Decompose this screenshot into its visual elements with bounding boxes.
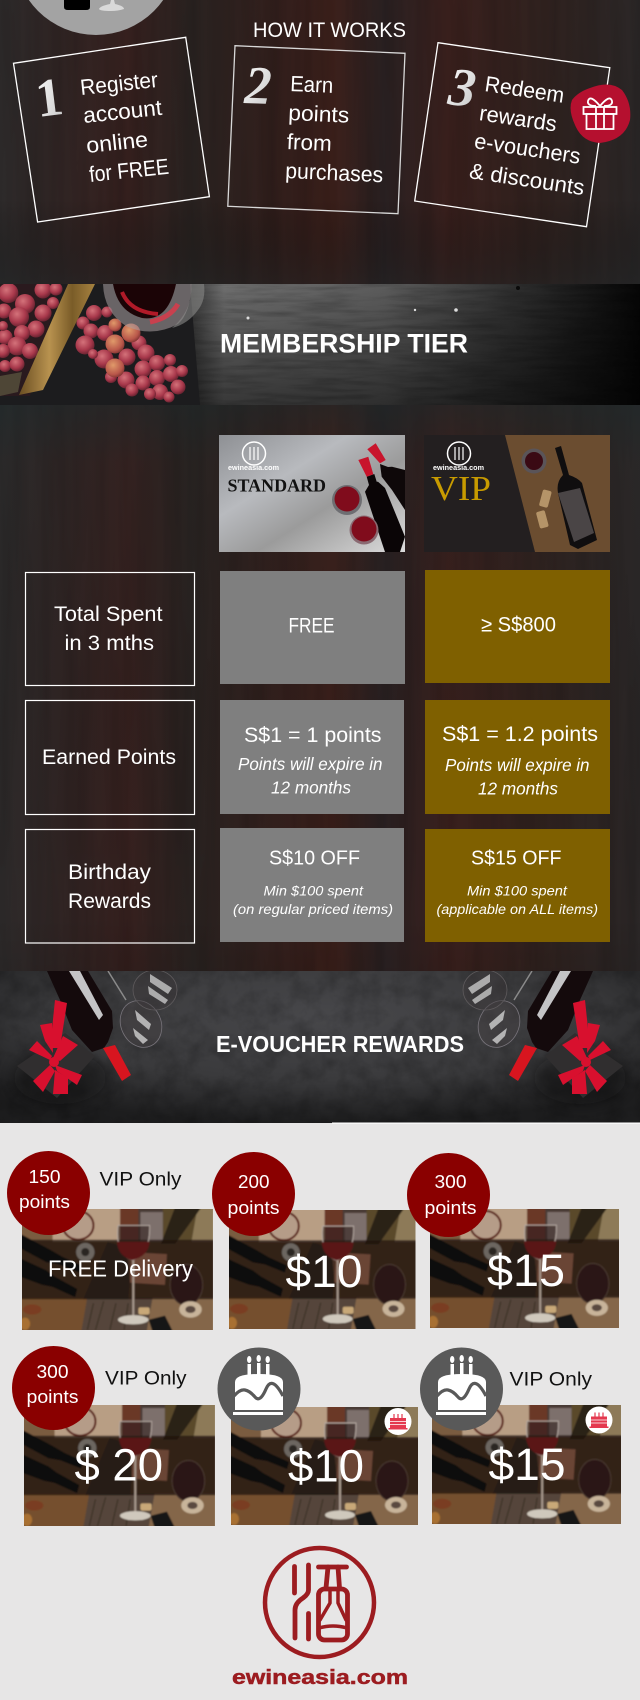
vip: earned points cell [425, 700, 610, 814]
standard: birthday cell [220, 828, 404, 942]
row label: total spent: in 3 mths [64, 632, 154, 655]
voucher: $10 birthday [218, 1348, 420, 1527]
logo mark [265, 1548, 374, 1657]
row label: earned points: Earned Points [42, 746, 176, 769]
card: vip tier: VIP [431, 469, 491, 508]
standard: earned points cell: Points will expire in [238, 754, 382, 774]
points badge: 300 [407, 1153, 490, 1237]
points badge: 150: points [19, 1191, 70, 1212]
points badge: 300: 300 [36, 1361, 68, 1382]
voucher title: FREE Delivery [48, 1256, 193, 1282]
panel: how it works [0, 0, 640, 284]
vip: total spent cell: ≥ S$800 [481, 614, 556, 636]
card: vip tier [424, 435, 610, 552]
voucher: $10 for 200 points [212, 1152, 417, 1331]
points badge: 300 [12, 1346, 95, 1430]
card: standard tier: STANDARD [228, 476, 326, 496]
icon: birthday cake badge [218, 1348, 300, 1430]
standard: earned points cell: 12 months [271, 778, 351, 798]
heading: e-voucher rewards: E-VOUCHER REWARDS [216, 1031, 464, 1057]
voucher value: $10 [286, 1246, 362, 1297]
voucher: free delivery [7, 1151, 215, 1332]
standard: total spent cell [220, 571, 405, 684]
label: vip only: VIP Only [100, 1168, 182, 1190]
points badge: 200: points [228, 1197, 280, 1218]
standard: total spent cell: FREE [288, 614, 334, 638]
step 1 card: account [82, 95, 163, 128]
voucher: $20 for 300 points [12, 1346, 217, 1528]
vip: earned points cell: Points will expire in [445, 755, 590, 775]
wordmark: ewineasia.com [232, 1666, 408, 1689]
heading: how it works: HOW IT WORKS [253, 19, 406, 42]
icon: red gift badge [571, 84, 630, 143]
step 1 card: 1 [32, 66, 66, 129]
row label: birthday rewards: Birthday [68, 861, 152, 884]
illustration: bottle, glasses and gift right [463, 970, 626, 1104]
step 1 card: online [85, 127, 149, 158]
illustration: wine glass [103, 284, 204, 332]
vip: birthday cell [425, 829, 610, 942]
vip: birthday cell: Min $100 spent [467, 882, 568, 898]
voucher value: $15 [487, 1245, 565, 1296]
icon: small pink cake [586, 1406, 612, 1434]
step 3 card: 3 [445, 56, 479, 119]
banner: e-voucher rewards [0, 970, 640, 1124]
step 3 card: e-vouchers [473, 128, 582, 169]
step 3 card: rewards [478, 100, 559, 136]
step 2 card: points [288, 100, 350, 128]
voucher: $15 for 300 points [407, 1153, 621, 1330]
icon: birthday cake badge [420, 1348, 503, 1430]
step 1 card [14, 37, 209, 222]
card: standard tier [219, 435, 405, 552]
card: vip tier: ewineasia.com [433, 465, 484, 472]
row label: birthday rewards [26, 830, 194, 943]
standard: birthday cell: (on regular priced items) [233, 901, 393, 917]
row label: birthday rewards: Rewards [68, 890, 151, 913]
standard: birthday cell: S$10 OFF [269, 846, 360, 870]
step 3 card: Redeem [483, 71, 566, 108]
standard: birthday cell: Min $100 spent [264, 882, 364, 898]
points badge: 200: 200 [238, 1171, 270, 1192]
illustration: bottle, glasses and gift left [14, 970, 177, 1104]
row label: earned points [26, 700, 194, 814]
voucher value: $15 [488, 1439, 566, 1490]
standard: earned points cell [220, 700, 404, 814]
illustration: grapes in crate [0, 282, 204, 405]
vip: total spent cell [425, 570, 610, 683]
logo: ewineasia [232, 1548, 408, 1689]
card: standard tier: ewineasia.com [228, 465, 279, 472]
vip: earned points cell: S$1 = 1.2 points [442, 723, 598, 746]
panel: membership comparison table [0, 405, 640, 971]
vip: birthday cell: S$15 OFF [471, 846, 562, 870]
points badge: 300: 300 [434, 1171, 466, 1192]
icon: small pink cake [384, 1408, 412, 1435]
points badge: 300: points [26, 1386, 78, 1407]
step 2 card: Earn [290, 71, 334, 98]
points badge: 300: points [424, 1197, 476, 1218]
points badge: 150: 150 [28, 1166, 60, 1187]
vip: birthday cell: (applicable on ALL items) [436, 901, 598, 917]
voucher value: $10 [288, 1440, 364, 1492]
vip: earned points cell: 12 months [478, 778, 558, 798]
step 3 card [415, 43, 610, 227]
label: vip only: VIP Only [105, 1368, 187, 1390]
step 1 card: Register [79, 67, 159, 100]
voucher: $15 birthday [420, 1348, 623, 1526]
points badge: 150 [7, 1151, 90, 1235]
label: vip only: VIP Only [510, 1368, 592, 1390]
row label: total spent [26, 572, 194, 686]
step 2 card: from [286, 129, 332, 156]
points badge: 200 [212, 1152, 295, 1236]
row label: total spent: Total Spent [54, 603, 163, 626]
step 1 card: for FREE [88, 154, 170, 187]
step 2 card: purchases [285, 158, 384, 187]
heading: membership tier: MEMBERSHIP TIER [220, 328, 468, 358]
voucher value: $ 20 [74, 1440, 163, 1490]
step 2 card [228, 46, 405, 214]
icon: grey circle with bottle and glass [14, 0, 178, 35]
standard: earned points cell: S$1 = 1 points [244, 724, 382, 747]
step 2 card: 2 [243, 55, 273, 116]
step 3 card: & discounts [468, 158, 586, 200]
